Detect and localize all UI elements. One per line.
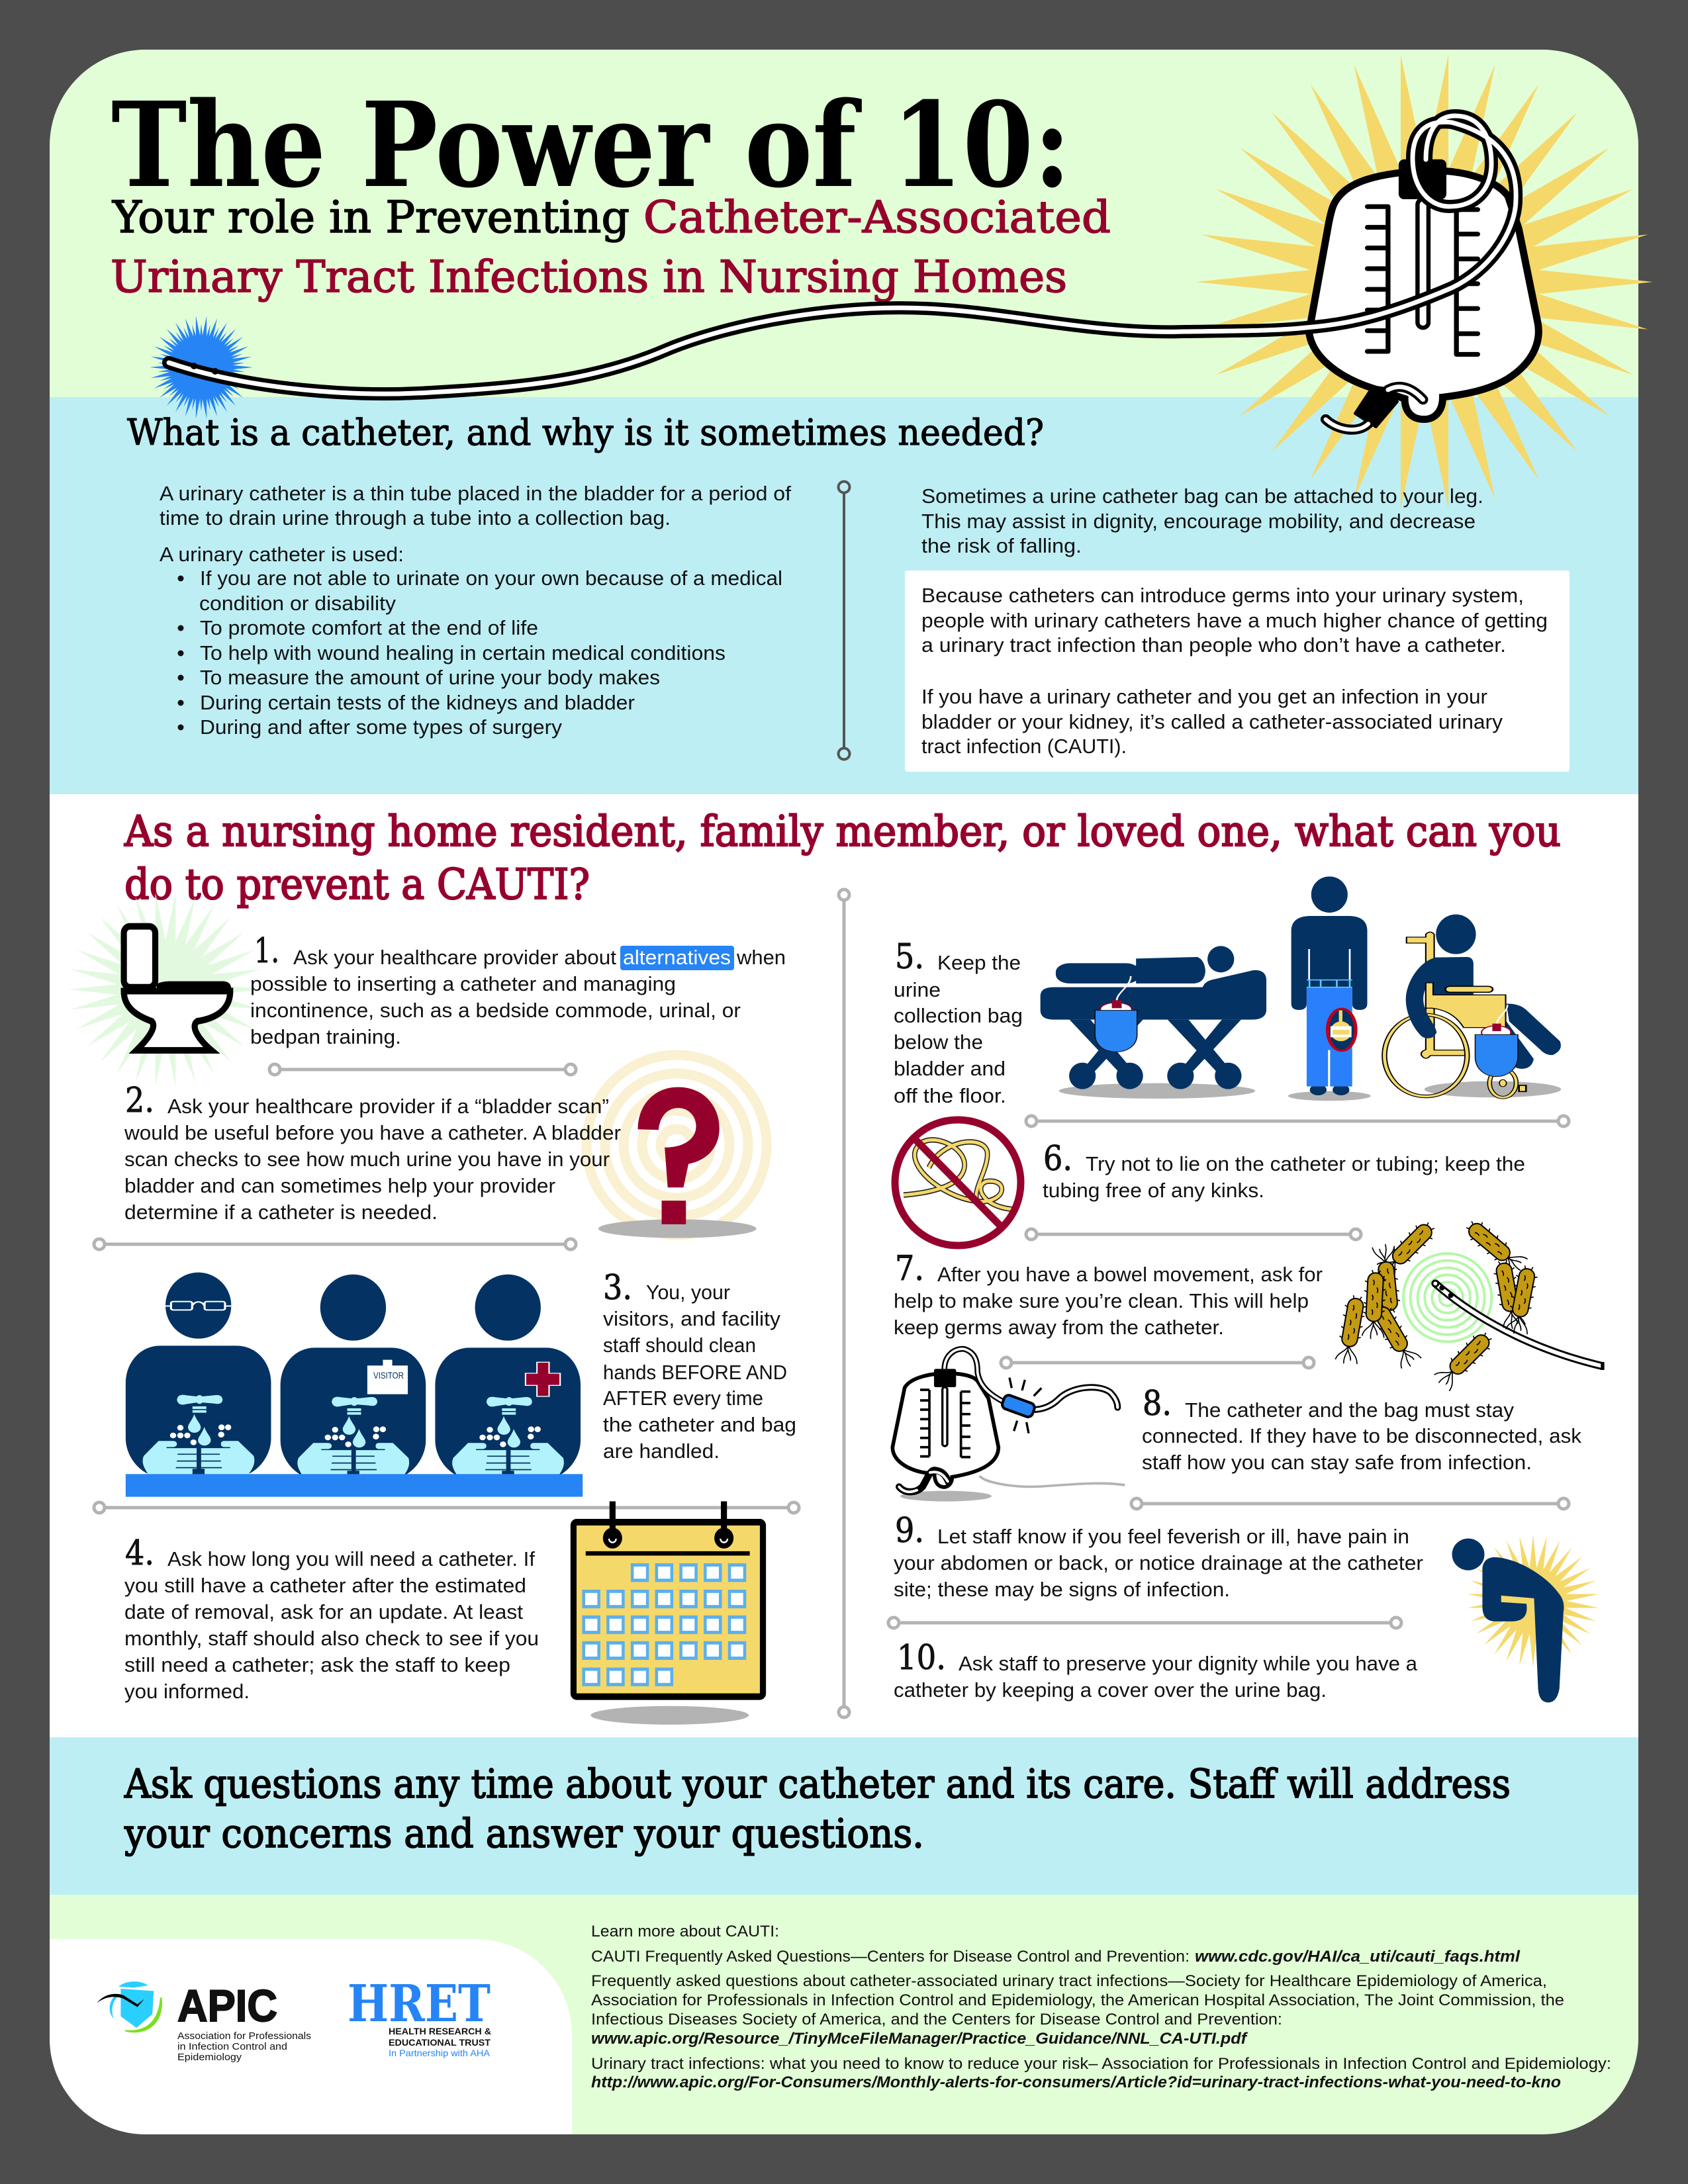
icon: person in pain (1447, 1510, 1619, 1703)
step 2: bladder and can sometimes help your provider (124, 1174, 555, 1197)
subtitle: Urinary Tract Infections in Nursing Homes (111, 251, 1067, 302)
text block: catheter definition and uses: time to drain urine through a tube into a collection bag. (160, 506, 671, 529)
step 1: when (736, 946, 786, 969)
logo: APIC: in Infection Control and (177, 2041, 287, 2052)
subtitle: Your role in Preventing (112, 192, 630, 243)
logo: APIC (97, 1981, 311, 2063)
step 3: 3. (603, 1269, 632, 1308)
step 10: catheter by keeping a cover over the urine bag. (894, 1678, 1327, 1702)
step 4: date of removal, ask for an update. At least (124, 1600, 523, 1623)
step 5: urine (894, 978, 941, 1001)
callout: infection risk: Because catheters can introduce germs into your urinary system, (921, 584, 1524, 607)
step 1: incontinence, such as a bedside commode, urinal, or (250, 999, 741, 1022)
icon: three people washing hands: VISITOR (373, 1370, 404, 1381)
step 5: Keep the (937, 951, 1021, 974)
step 4: Ask how long you will need a catheter. If (167, 1547, 535, 1570)
icon: germs around catheter tip (1335, 1216, 1605, 1392)
step 4: monthly, staff should also check to see if you (124, 1627, 539, 1650)
figure: patient on stretcher (1041, 946, 1266, 1099)
logo: HRET: In Partnership with AHA (389, 2048, 491, 2058)
text block: learn more references: Urinary tract infections: what you need to know to reduce your risk– Association for Professionals in Infection Control and Epidemiology: (591, 2055, 1611, 2073)
subtitle (111, 192, 1111, 302)
step 2: scan checks to see how much urine you have in your (124, 1148, 610, 1171)
person: resident with glasses (126, 1273, 271, 1475)
step 1: possible to inserting a catheter and managing (250, 972, 676, 995)
icon: question mark with rings (586, 1055, 767, 1238)
step 5: bladder and (894, 1057, 1006, 1080)
text block: leg bag (921, 484, 1483, 557)
icon: people with bag below bladder (1041, 876, 1561, 1101)
text block: catheter definition and uses: To promote comfort at the end of life (200, 616, 538, 639)
step 6: tubing free of any kinks. (1043, 1179, 1264, 1202)
text block: catheter definition and uses: A urinary catheter is used: (160, 543, 404, 566)
text block: learn more references: Frequently asked questions about catheter-associated urinary tract infections—Society for Healthcare Epidemiology of America, (591, 1972, 1547, 1990)
step 5: 5. (895, 938, 924, 977)
text block: learn more references: www.cdc.gov/HAI/ca_uti/cauti_faqs.html (1195, 1948, 1521, 1966)
step 8: The catheter and the bag must stay (1185, 1398, 1514, 1422)
step 4: still need a catheter; ask the staff to keep (124, 1653, 510, 1676)
step 1: alternatives (623, 946, 731, 969)
step 4 (124, 1534, 539, 1703)
person: staff (435, 1275, 581, 1477)
heading: prevention (124, 807, 1561, 909)
step 5 (894, 938, 1023, 1107)
text block: catheter definition and uses: To measure the amount of urine your body makes (200, 666, 660, 689)
title: The Power of 10: (111, 76, 1071, 214)
step 3: the catheter and bag (603, 1413, 796, 1436)
text block: learn more references: Learn more about CAUTI: (591, 1923, 779, 1940)
banner: ask questions: your concerns and answer your questions. (124, 1811, 924, 1857)
step 5: collection bag (894, 1004, 1023, 1027)
step 2: 2. (125, 1081, 154, 1120)
icon: calendar (573, 1501, 763, 1725)
logo: APIC: Epidemiology (177, 2052, 242, 2063)
callout: infection risk: people with urinary catheters have a much higher chance of getting (921, 609, 1548, 632)
logo: APIC: APIC (177, 1981, 277, 2031)
figure: person in wheelchair (1384, 915, 1561, 1097)
logo: APIC: Association for Professionals (177, 2030, 311, 2042)
text block: catheter definition and uses: During certain tests of the kidneys and bladder (200, 691, 635, 714)
text block: leg bag: This may assist in dignity, encourage mobility, and decrease (921, 510, 1476, 533)
step 2: Ask your healthcare provider if a “bladder scan” (167, 1095, 609, 1118)
step 7: 7. (895, 1250, 924, 1289)
step 6: 6. (1043, 1140, 1072, 1179)
banner: ask questions (124, 1761, 1511, 1857)
text block: learn more references: CAUTI Frequently Asked Questions—Centers for Disease Control and Prevention: (591, 1948, 1190, 1966)
callout: infection risk: bladder or your kidney, it’s called a catheter-associated urinary (921, 710, 1503, 733)
text block: catheter definition and uses: If you are not able to urinate on your own because of a medical (200, 567, 782, 590)
sunburst: yellow (1156, 0, 1688, 569)
icon: no kinks (895, 1120, 1021, 1246)
step 2 (124, 1081, 621, 1224)
logo: HRET (348, 1974, 491, 2058)
icon: toilet with green burst (51, 867, 280, 1112)
text block: leg bag: Sometimes a urine catheter bag can be attached to your leg. (921, 484, 1483, 508)
step 3: hands BEFORE AND (603, 1361, 787, 1384)
text block: learn more references: http://www.apic.org/For-Consumers/Monthly-alerts-for-consumers/Article?id=urinary-tract-infections-what-you-need-to-kno (591, 2073, 1561, 2091)
step 9: Let staff know if you feel feverish or ill, have pain in (937, 1525, 1409, 1548)
text block: catheter definition and uses (160, 482, 791, 739)
step 9: your abdomen or back, or notice drainage at the catheter (894, 1551, 1423, 1574)
callout: infection risk: tract infection (CAUTI). (921, 735, 1127, 758)
step 4: you still have a catheter after the estimated (124, 1574, 526, 1597)
text block: catheter definition and uses: condition or disability (199, 592, 397, 615)
step 3: visitors, and facility (603, 1307, 781, 1330)
subtitle: Catheter-Associated (643, 192, 1111, 243)
step 9: 9. (895, 1512, 924, 1551)
step 4: 4. (125, 1534, 154, 1573)
step 3: are handled. (603, 1439, 720, 1463)
text block: leg bag: the risk of falling. (921, 534, 1082, 557)
text block: learn more references (591, 1923, 1611, 2091)
heading: prevention: do to prevent a CAUTI? (124, 860, 590, 909)
callout: infection risk (905, 570, 1570, 772)
step 3 (603, 1269, 796, 1463)
text block: learn more references: Association for Professionals in Infection Control and Epidemiology, the American Hospital Association, The Joint Commission, the (591, 1991, 1564, 2009)
icon: blue burst at catheter tip (140, 302, 262, 432)
step 4: you informed. (124, 1680, 250, 1703)
heading: prevention: As a nursing home resident, family member, or loved one, what can you (124, 807, 1561, 856)
bag body (1309, 159, 1538, 430)
step 3: staff should clean (603, 1334, 756, 1357)
step 1: bedpan training. (250, 1025, 401, 1048)
icon: bag and connector (892, 1349, 1125, 1502)
person: visitor (281, 1275, 426, 1477)
text block: catheter definition and uses: A urinary catheter is a thin tube placed in the bladder for a period of (160, 482, 791, 505)
step 7 (894, 1250, 1323, 1339)
step 10: Ask staff to preserve your dignity while you have a (959, 1652, 1418, 1675)
logo: HRET: HRET (348, 1974, 491, 2034)
callout: infection risk: If you have a urinary catheter and you get an infection in your (921, 685, 1487, 708)
heading: what is a catheter: What is a catheter, and why is it sometimes needed? (127, 412, 1044, 453)
step 7: After you have a bowel movement, ask for (937, 1263, 1323, 1286)
logo: HRET: HEALTH RESEARCH & (389, 2026, 491, 2036)
sink bar (126, 1474, 583, 1497)
step 2: determine if a catheter is needed. (124, 1201, 438, 1224)
icon: catheter bag with sunburst and tube (140, 0, 1688, 569)
text block: catheter definition and uses: To help with wound healing in certain medical conditions (200, 641, 726, 664)
step 6 (1043, 1140, 1525, 1202)
callout: infection risk: a urinary tract infection than people who don’t have a catheter. (921, 633, 1506, 657)
step 8: connected. If they have to be disconnected, ask (1142, 1424, 1582, 1447)
step 8: 8. (1143, 1385, 1172, 1424)
logo: HRET: EDUCATIONAL TRUST (389, 2037, 491, 2048)
icon: three people washing hands (126, 1273, 583, 1497)
step 10 (894, 1639, 1418, 1702)
step 7: help to make sure you’re clean. This will help (894, 1289, 1309, 1312)
step 9 (894, 1512, 1423, 1601)
figure: standing person (1288, 876, 1371, 1101)
step 8: staff how you can stay safe from infection. (1142, 1451, 1532, 1474)
step 8 (1142, 1385, 1582, 1474)
catheter tube (169, 116, 1516, 394)
step 7: keep germs away from the catheter. (894, 1316, 1224, 1339)
step 1: 1. (254, 932, 279, 971)
step 9: site; these may be signs of infection. (894, 1578, 1230, 1601)
step 5: off the floor. (894, 1084, 1006, 1107)
step 5: below the (894, 1030, 983, 1054)
step 3: You, your (646, 1281, 730, 1304)
step 3: AFTER every time (603, 1387, 763, 1410)
step 1 (250, 932, 786, 1048)
step 2: would be useful before you have a catheter. A bladder (124, 1121, 621, 1144)
text block: learn more references: www.apic.org/Resource_/TinyMceFileManager/Practice_Guidance/NNL_CA-UTI.pdf (591, 2030, 1248, 2048)
text block: learn more references: Infectious Diseases Society of America, and the Centers for Disease Control and Prevention: (591, 2011, 1282, 2028)
step 10: 10. (897, 1639, 946, 1678)
banner: ask questions: Ask questions any time about your catheter and its care. Staff will address (124, 1761, 1511, 1807)
step 1: Ask your healthcare provider about (293, 946, 616, 969)
text block: catheter definition and uses: During and after some types of surgery (200, 715, 563, 739)
step 6: Try not to lie on the catheter or tubing; keep the (1086, 1152, 1525, 1175)
